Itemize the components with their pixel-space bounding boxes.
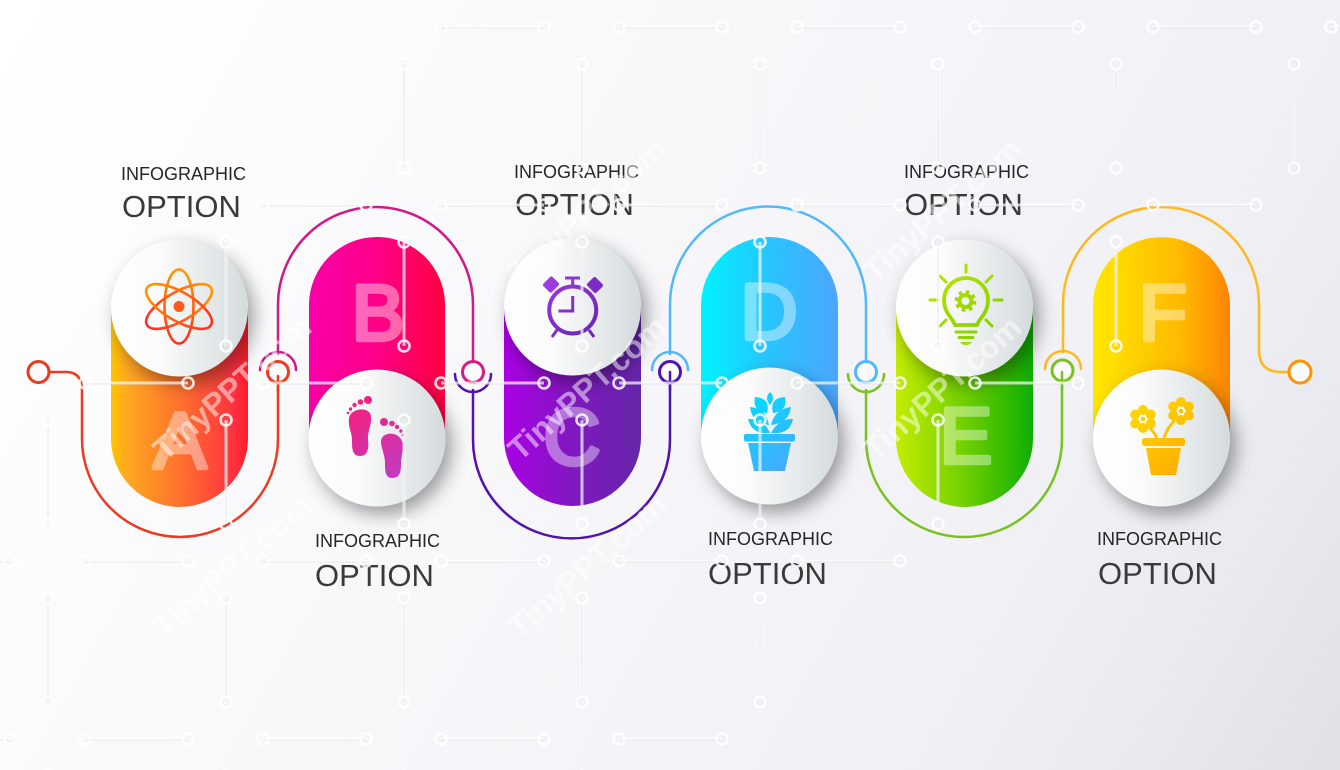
heading B: INFOGRAPHIC [315, 531, 440, 551]
heading D: OPTION [708, 556, 827, 591]
connector line: E green [848, 360, 1073, 537]
panel: D [701, 237, 838, 504]
letter C: C [543, 392, 601, 481]
letter F: F [1139, 268, 1187, 357]
watermarks: TinyPPT.com [501, 131, 673, 289]
letter A: A [154, 396, 207, 485]
watermarks: TinyPPT.com [856, 131, 1028, 289]
heading B [315, 531, 440, 593]
disc B [308, 370, 446, 506]
panel: B [308, 237, 446, 506]
pill B [309, 237, 445, 438]
connector line: A red [28, 362, 288, 537]
heading E [904, 162, 1029, 222]
icon: footprints [347, 396, 404, 478]
watermarks: TinyPPT.com [856, 309, 1028, 467]
heading C: OPTION [515, 187, 634, 222]
panel: C [504, 238, 641, 506]
pill D [701, 237, 838, 436]
connector line: D blue [652, 206, 876, 382]
pill E [896, 308, 1033, 507]
heading A [121, 164, 246, 224]
letter D: D [740, 267, 798, 356]
pill C [504, 307, 641, 506]
pill A [111, 308, 248, 507]
heading F: INFOGRAPHIC [1097, 529, 1222, 549]
icon: atom [140, 270, 218, 344]
heading B: OPTION [315, 558, 434, 593]
panel: A [111, 240, 248, 507]
letter B: B [352, 268, 404, 357]
connector line: B magenta [260, 207, 484, 382]
icon: potted plant [744, 392, 795, 471]
disc F [1093, 370, 1230, 506]
pill F [1093, 237, 1230, 438]
disc D [701, 368, 838, 504]
icon: light bulb with gear [930, 265, 1002, 345]
heading C: INFOGRAPHIC [514, 162, 639, 182]
watermarks: TinyPPT.com [146, 309, 318, 467]
watermarks: TinyPPT.com [501, 487, 673, 645]
heading F [1097, 529, 1222, 591]
heading A: OPTION [122, 189, 241, 224]
heading D [708, 529, 833, 591]
heading F: OPTION [1098, 556, 1217, 591]
heading C [514, 162, 639, 222]
heading D: INFOGRAPHIC [708, 529, 833, 549]
panel: F [1093, 237, 1230, 506]
heading E: INFOGRAPHIC [904, 162, 1029, 182]
watermarks [146, 131, 1028, 645]
letter E: E [940, 391, 992, 480]
connector line: C purple [455, 362, 680, 538]
disc C [504, 238, 641, 376]
disc A [111, 240, 248, 376]
panel: E [896, 240, 1033, 507]
watermarks: TinyPPT.com [146, 487, 318, 645]
heading A: INFOGRAPHIC [121, 164, 246, 184]
watermarks: TinyPPT.com [501, 309, 673, 467]
disc E [896, 240, 1033, 376]
icon: alarm clock [542, 276, 604, 337]
icon: flower pot [1130, 397, 1194, 475]
heading E: OPTION [904, 187, 1023, 222]
connector line: F yellow [1045, 207, 1311, 383]
